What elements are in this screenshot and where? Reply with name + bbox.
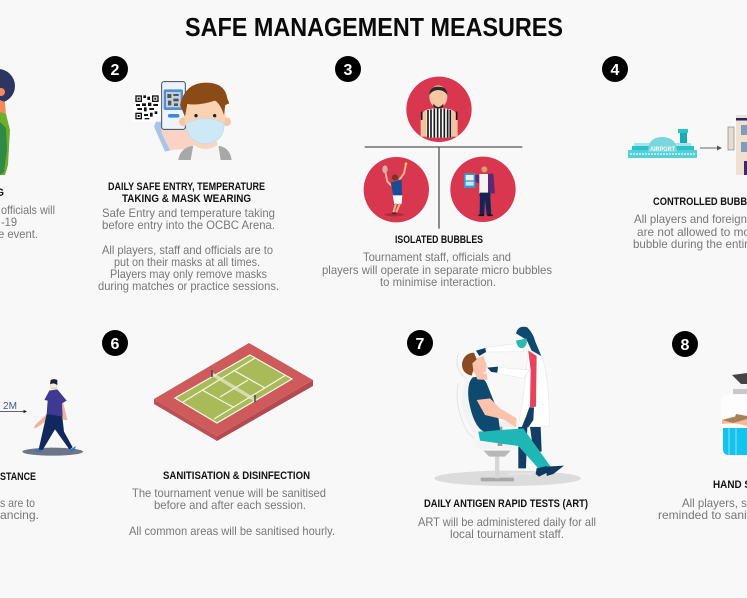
panel: 5 safe distance (cropped) <box>0 379 83 522</box>
text: 7 body: ART will be administered daily for all <box>418 515 596 529</box>
panel: 4 controlled bubble (cropped) <box>602 56 747 251</box>
icon: walking man with mask <box>22 379 83 456</box>
diagram: bubbles with dividers <box>364 77 522 229</box>
panel: 6 sanitisation <box>102 330 335 538</box>
patient <box>457 353 564 477</box>
text: 4 body <box>633 212 747 251</box>
icon: referee bubble <box>406 77 472 142</box>
icon: boy with mask <box>178 83 232 160</box>
heading: 5: STANCE <box>0 471 36 483</box>
arrow: airport to hotel <box>700 146 722 150</box>
badge 3: 3 <box>344 62 353 79</box>
text: 3 body <box>322 250 552 289</box>
badge 3 <box>335 56 361 82</box>
icon: tennis player bubble <box>364 157 429 222</box>
panel: 3 isolated bubbles <box>322 56 552 289</box>
text: 2 body: put on their masks at all times. <box>114 255 260 269</box>
text: 2 body: during matches or practice sessions. <box>98 279 279 293</box>
icon: sanitiser bottle with hands <box>721 373 747 458</box>
text: 8 body <box>658 496 747 522</box>
badge 8: 8 <box>681 337 690 354</box>
badge 8 <box>672 331 698 357</box>
icon: QR code <box>135 95 159 119</box>
text: 5 body <box>0 496 39 522</box>
badge 2 <box>102 56 128 82</box>
heading: 6: SANITISATION & DISINFECTION <box>163 470 310 482</box>
badge 6: 6 <box>111 336 120 353</box>
arrow: 2M distance <box>0 400 27 413</box>
heading: 2 <box>108 181 265 205</box>
panel: 2 safe entry and masks <box>98 56 279 293</box>
illustration: tennis court <box>154 343 313 441</box>
text: 2 body: Safe Entry and temperature taking <box>102 206 275 220</box>
text: 1 body: officials will <box>1 203 55 217</box>
heading: 2: TAKING & MASK WEARING <box>122 193 251 205</box>
text: 2 body: Players may only remove masks <box>110 267 267 281</box>
badge 7: 7 <box>416 336 425 353</box>
arrow: 2M distance: 2M <box>3 400 17 412</box>
badge 7 <box>407 330 433 356</box>
panel: 7 antigen tests <box>407 327 596 541</box>
text: 7 body <box>418 515 596 541</box>
text: 3 body: to minimise interaction. <box>380 275 496 289</box>
text: 5 body: ancing. <box>0 508 39 522</box>
text: 7 body: local tournament staff. <box>450 527 564 541</box>
text: 1 body <box>0 203 55 241</box>
nurse <box>476 327 549 475</box>
heading: 2: DAILY SAFE ENTRY, TEMPERATURE <box>108 181 265 193</box>
panel: 1 testing (cropped) <box>0 69 55 241</box>
icon: phone <box>162 82 185 129</box>
text: 6 body: The tournament venue will be sanitised <box>132 486 326 500</box>
heading: 3: ISOLATED BUBBLES <box>395 234 483 246</box>
badge 4: 4 <box>611 62 620 79</box>
icon: airport: AIRPORT <box>650 147 675 153</box>
icon: person in green jacket <box>0 69 15 175</box>
icon: airport <box>628 129 697 158</box>
badge 2: 2 <box>111 62 120 79</box>
title: SAFE MANAGEMENT MEASURES <box>185 12 563 42</box>
text: 3 body: players will operate in separate micro bubbles <box>322 263 552 277</box>
badge 6 <box>102 330 128 356</box>
heading: 7: DAILY ANTIGEN RAPID TESTS (ART) <box>424 498 588 510</box>
text: 2 body: before entry into the OCBC Arena. <box>102 218 275 232</box>
text: 6 body: All common areas will be sanitised hourly. <box>129 524 335 538</box>
text: 2 body <box>98 206 279 293</box>
text: 2 body: All players, staff and officials are to <box>102 243 273 257</box>
text: 6 body: before and after each session. <box>154 498 306 512</box>
panel: 8 hand sanitising (cropped) <box>658 331 747 522</box>
text: 5 body: s are to <box>0 496 35 510</box>
badge 4 <box>602 56 628 82</box>
icon: QR code, phone and masked boy <box>133 82 232 160</box>
text: 6 body <box>129 486 335 538</box>
icon: official bubble <box>450 157 516 222</box>
text: 3 body: Tournament staff, officials and <box>363 250 511 264</box>
illustration: nurse swabbing seated patient <box>434 327 581 486</box>
icon: hotel (cropped) <box>728 115 747 175</box>
text: 1 body: -19 <box>1 215 17 229</box>
